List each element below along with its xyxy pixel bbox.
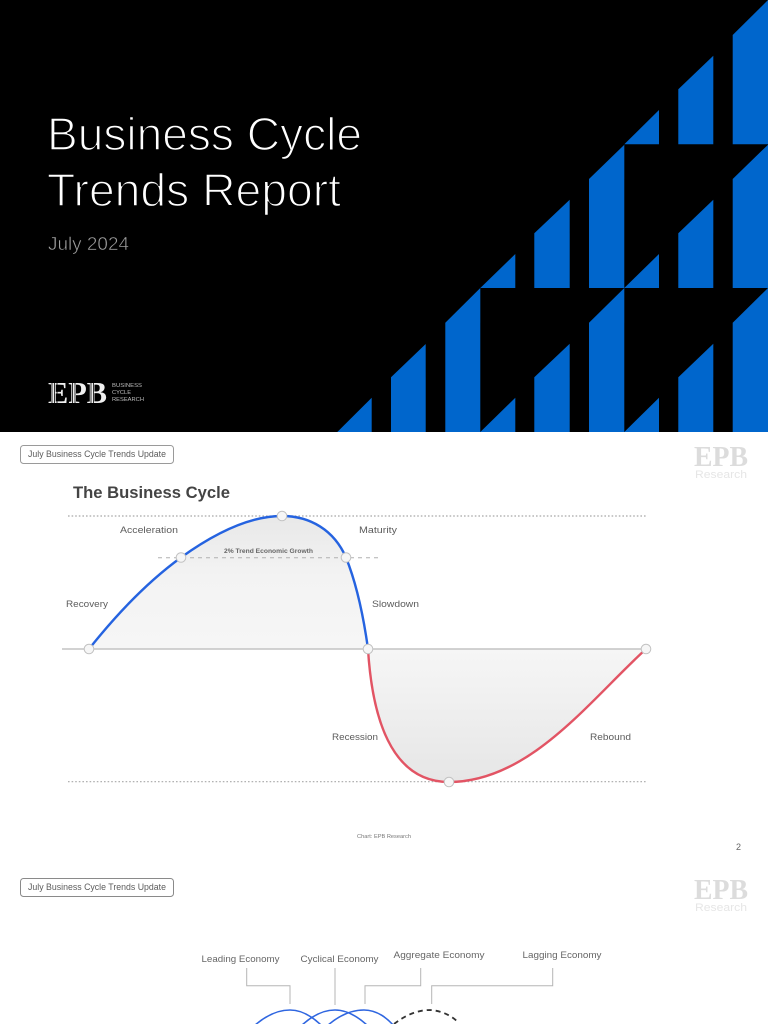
phase labels: Recovery bbox=[66, 599, 108, 609]
economy labels: Aggregate Economy bbox=[394, 950, 485, 960]
reference lines bbox=[62, 516, 646, 782]
logo: EPB Business Cycle Research: RESEARCH bbox=[112, 397, 144, 403]
brand mark: Research bbox=[695, 902, 747, 914]
title: Trends Report bbox=[47, 164, 341, 216]
slide tag: July Business Cycle Trends Update bbox=[28, 449, 166, 459]
chart: business cycle curve bbox=[62, 511, 651, 787]
economy labels: Leading Economy bbox=[202, 954, 280, 964]
economy labels bbox=[202, 950, 602, 964]
phase labels: Recession bbox=[332, 732, 378, 742]
brand mark: EPB bbox=[694, 875, 748, 906]
brand mark: EPB bbox=[694, 442, 748, 473]
trend label: 2% Trend Economic Growth bbox=[224, 549, 313, 555]
panel: cover bbox=[0, 0, 768, 432]
phase labels: Acceleration bbox=[120, 525, 178, 535]
slide tag bbox=[20, 446, 174, 464]
economy labels: Cyclical Economy bbox=[300, 954, 379, 964]
area below trend axis bbox=[368, 649, 646, 782]
cover date: July 2024 bbox=[48, 234, 129, 254]
chart heading: The Business Cycle bbox=[73, 484, 230, 502]
title: Business Cycle bbox=[47, 108, 362, 160]
logo: EPB Business Cycle Research: BUSINESS bbox=[112, 383, 142, 389]
brand mark: Research bbox=[695, 469, 747, 481]
blue stepped pattern bbox=[337, 0, 768, 432]
chart: economy waves bbox=[254, 1010, 458, 1024]
phase labels bbox=[66, 525, 631, 742]
panel: slide 2 bbox=[20, 442, 748, 852]
panel: slide 3 bbox=[20, 875, 748, 1024]
phase labels: Maturity bbox=[359, 525, 397, 535]
connector lines bbox=[247, 968, 553, 1005]
red contraction line bbox=[368, 649, 646, 782]
phase labels: Slowdown bbox=[372, 599, 419, 609]
chart source: Chart: EPB Research bbox=[357, 834, 411, 840]
title bbox=[47, 108, 362, 216]
page number: 2 bbox=[736, 842, 741, 852]
phase markers bbox=[84, 511, 651, 787]
area above trend axis bbox=[89, 516, 368, 649]
slide tag bbox=[20, 878, 174, 896]
phase labels: Rebound bbox=[590, 732, 631, 742]
logo: EPB Business Cycle Research: EPB bbox=[48, 375, 107, 410]
logo: EPB Business Cycle Research bbox=[48, 375, 144, 410]
blue expansion line bbox=[89, 516, 368, 649]
slide tag: July Business Cycle Trends Update bbox=[28, 882, 166, 892]
logo: EPB Business Cycle Research: CYCLE bbox=[112, 390, 131, 396]
economy labels: Lagging Economy bbox=[522, 950, 602, 960]
